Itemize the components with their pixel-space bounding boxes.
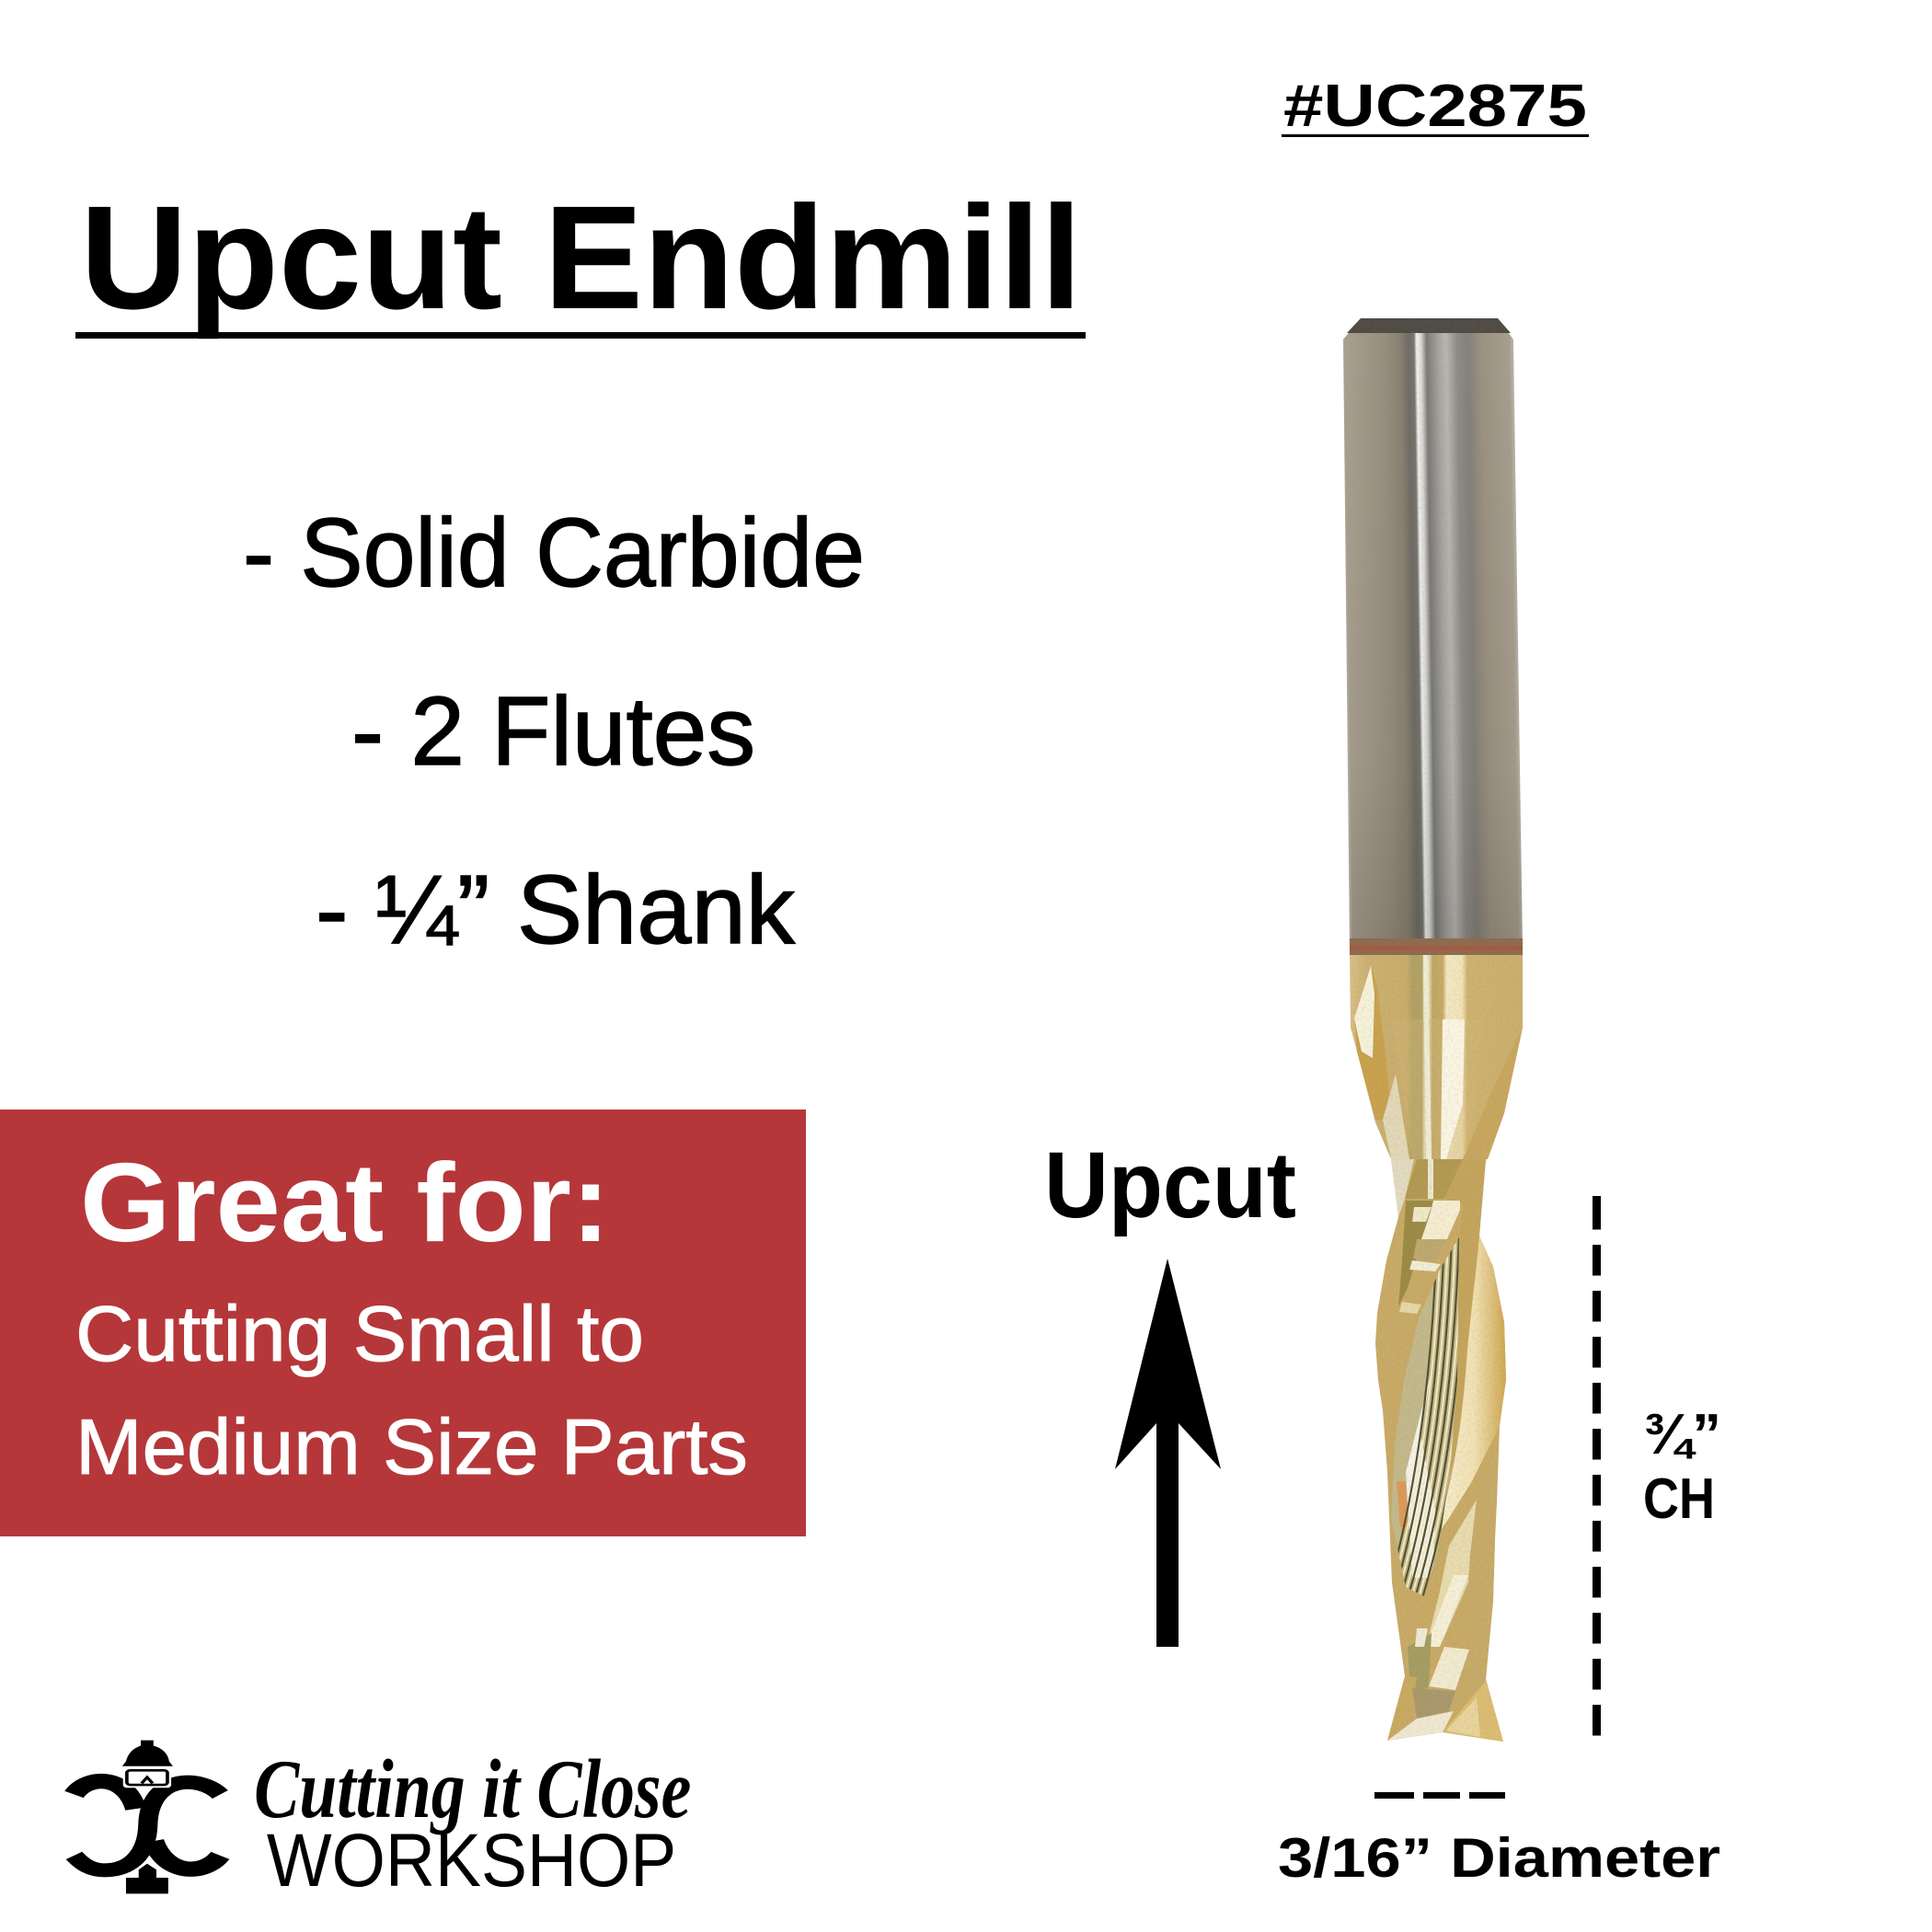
cutting height dashed line: [1593, 1199, 1601, 1736]
upper neck section: [1405, 1159, 1463, 1199]
neck bright window: [1391, 1019, 1483, 1159]
upcut label: Upcut: [1044, 1133, 1296, 1237]
lower right land: [1441, 1435, 1497, 1711]
shank: [1343, 318, 1523, 955]
feature list: - ¼” Shank: [316, 856, 796, 964]
panel: great for: Great for:: [80, 1140, 610, 1265]
logo: [74, 1741, 691, 1903]
product number: #UC2875: [1283, 72, 1587, 139]
feature list: [243, 499, 865, 964]
panel: great for: Medium Size Parts: [75, 1404, 748, 1491]
right flute cream: [1435, 1236, 1506, 1538]
cutting tip: [1443, 1681, 1503, 1742]
pale floor: [1387, 1711, 1454, 1741]
cutting height label: CH: [1643, 1467, 1715, 1531]
ribbed flute: [1391, 1237, 1459, 1596]
grey floor band: [1412, 1688, 1455, 1719]
upper land: [1431, 1159, 1486, 1490]
panel: great for: Cutting Small to: [75, 1291, 644, 1378]
logo script text: Cutting it Close: [254, 1743, 691, 1836]
arrow: upward direction: [1115, 1259, 1221, 1647]
dashed line top extension: [1593, 1196, 1601, 1201]
diameter dashes: [1374, 1792, 1505, 1799]
feature list: - 2 Flutes: [351, 677, 755, 786]
logo icon: [74, 1741, 220, 1893]
cutting height label: [1643, 1403, 1721, 1531]
diameter label: 3/16” Diameter: [1278, 1827, 1720, 1889]
title: Upcut Endmill: [80, 175, 1082, 339]
left tip land: [1387, 1676, 1417, 1741]
lower cream strip: [1426, 1500, 1477, 1647]
checker flute: [1398, 1201, 1446, 1314]
feature list: - Solid Carbide: [243, 499, 865, 607]
logo workshop text: WORKSHOP: [267, 1819, 676, 1903]
flute sliver: [1354, 966, 1389, 1120]
right neck land: [1463, 1028, 1523, 1159]
lower white patch: [1429, 1647, 1469, 1690]
body base: [1375, 1159, 1506, 1742]
olive patch: [1408, 1633, 1432, 1693]
white patch: [1421, 1201, 1460, 1239]
surface texture: [1351, 333, 1523, 1739]
left pale facet: [1391, 1159, 1414, 1217]
panel: great for: [0, 1110, 806, 1536]
cutting height label: ¾”: [1643, 1403, 1721, 1466]
endmill bit photo illustration: [1339, 313, 1527, 1748]
gold neck: [1350, 955, 1523, 1159]
